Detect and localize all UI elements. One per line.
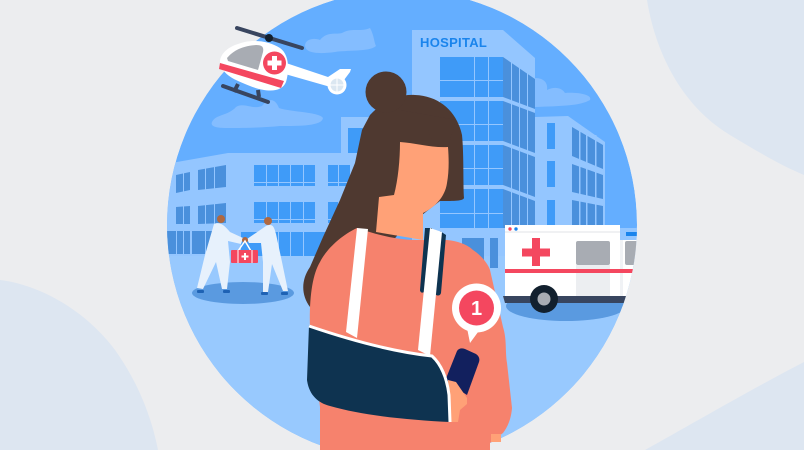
hair back [303,95,464,320]
scene circle [160,0,650,450]
hospital tower [412,30,535,240]
hospital sign: HOSPITAL [420,35,487,50]
cloud behind tower [535,78,590,107]
bangs [400,110,456,147]
doctor left [197,223,243,289]
helicopter [219,28,351,102]
small back building [341,117,369,153]
shirt [310,228,512,450]
hair bun [366,72,406,112]
right building [535,116,605,225]
ambulance [503,225,643,321]
left building [167,153,358,256]
notification badge: 1 [471,298,482,320]
notification badge [452,284,501,343]
far windows [462,232,638,268]
low building behind ambulance [440,228,640,268]
doctor right [247,225,288,292]
ground [160,256,650,450]
bag strap [420,228,446,296]
woman [303,72,512,450]
first aid bag [238,241,251,251]
clouds [212,28,376,128]
doctors carrying first aid bag [192,215,294,304]
arm sling [307,325,450,422]
sling straps [346,228,368,338]
cuff [491,434,501,442]
phone [445,348,479,395]
neck and face [376,142,449,240]
hand [448,380,467,422]
